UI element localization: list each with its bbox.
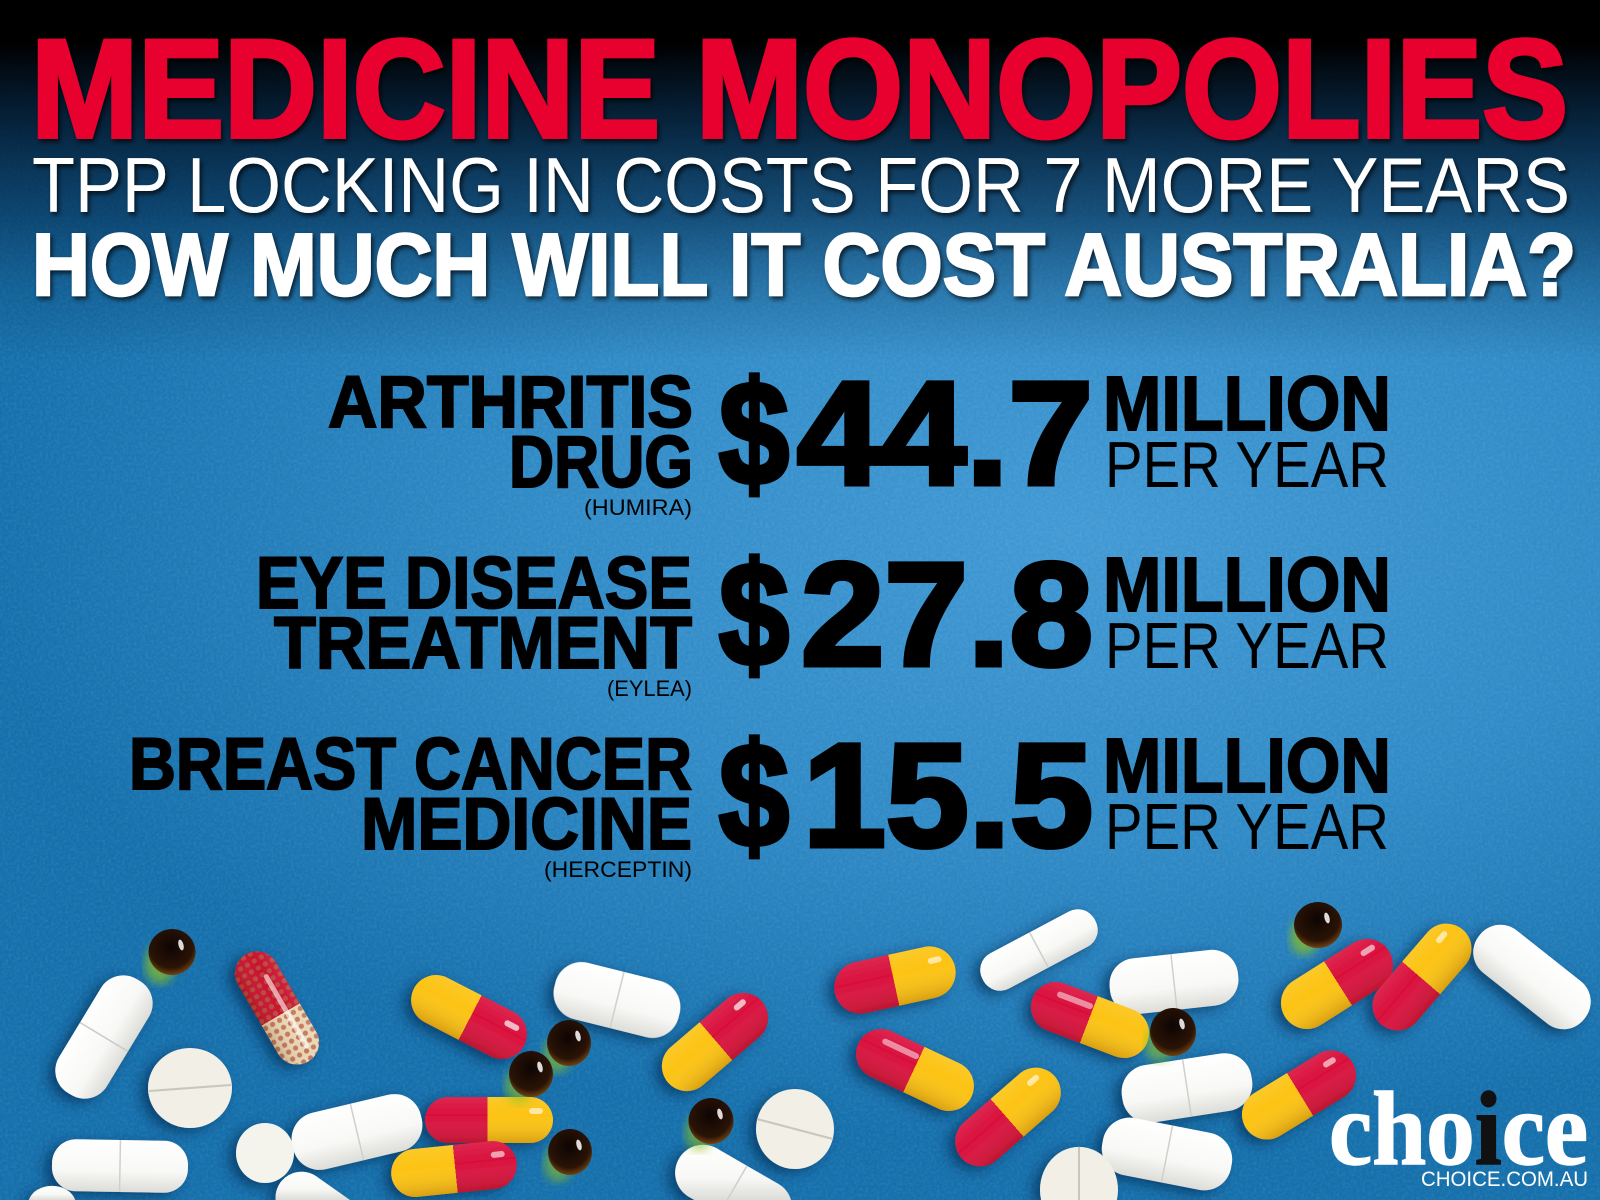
unit: MILLION: [1103, 361, 1391, 447]
logo: choice: [1329, 1070, 1588, 1191]
row label line 2: TREATMENT: [274, 603, 692, 684]
row: eye disease treatment: [256, 533, 1391, 701]
row label line 2: MEDICINE: [361, 784, 692, 865]
beaded capsule: [227, 943, 327, 1073]
unit: MILLION: [1103, 723, 1391, 809]
row: arthritis drug: [328, 352, 1391, 520]
row label: BREAST CANCER: [129, 724, 692, 805]
website url: CHOICE.COM.AU: [1421, 1168, 1588, 1191]
row label: EYE DISEASE: [256, 543, 692, 624]
illustration: scattered pills: [29, 903, 1600, 1200]
logo wordmark: choice: [1329, 1070, 1588, 1187]
period: PER YEAR: [1105, 609, 1389, 682]
row: breast cancer medicine: [129, 714, 1391, 882]
unit: MILLION: [1103, 542, 1391, 628]
round tablets: [148, 1048, 1118, 1200]
brand name: (EYLEA): [607, 676, 692, 701]
value: $: [719, 352, 789, 516]
value: $: [719, 714, 789, 878]
brand name: (HERCEPTIN): [544, 857, 692, 882]
value: 44.7: [797, 352, 1093, 516]
row label: ARTHRITIS: [328, 362, 693, 443]
brand name: (HUMIRA): [584, 495, 692, 520]
period: PER YEAR: [1105, 790, 1389, 863]
dark gel capsules: [145, 902, 1342, 1182]
value: 27.8: [801, 533, 1093, 697]
period: PER YEAR: [1105, 428, 1389, 501]
value: $: [719, 533, 789, 697]
heading block: [31, 10, 1576, 314]
white caplets: [29, 903, 1600, 1200]
two-tone capsules: [389, 913, 1482, 1199]
row label line 2: DRUG: [509, 422, 693, 503]
value: 15.5: [803, 714, 1093, 878]
